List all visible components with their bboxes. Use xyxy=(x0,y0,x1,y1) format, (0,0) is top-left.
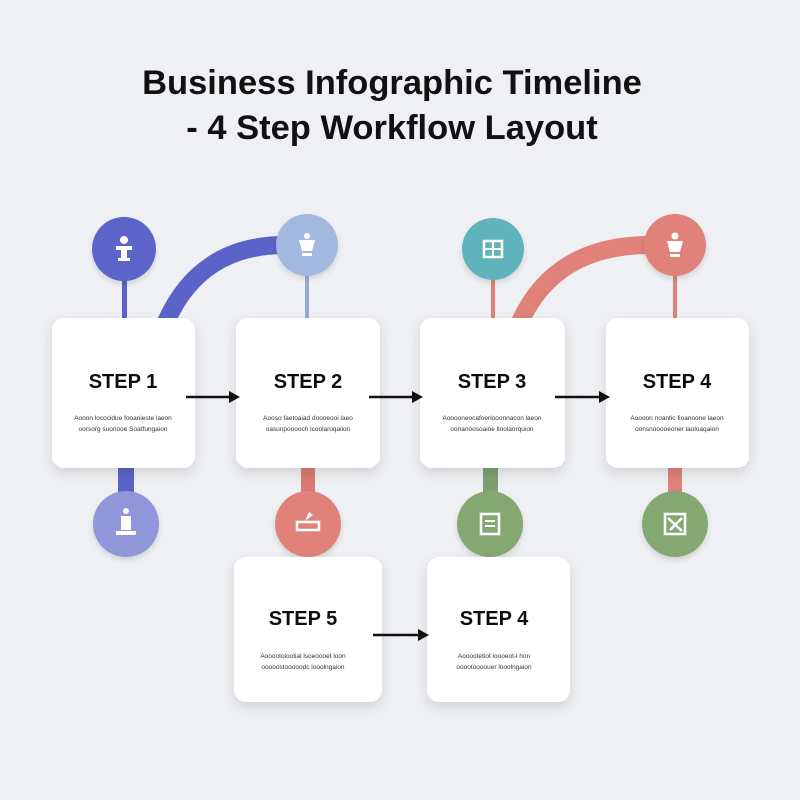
card: step1 xyxy=(52,318,195,468)
title xyxy=(142,64,642,147)
card: step4: STEP 4 xyxy=(643,371,712,393)
arrow: 5 to 4 xyxy=(373,629,429,641)
icon circle: step1 top xyxy=(92,217,156,281)
card: step4 bottom: Aooootetiot loooeot-l hon xyxy=(458,653,531,660)
card: step5: ooooostooooodc looolngaion xyxy=(261,664,345,671)
icon circle: step2 top xyxy=(276,214,338,276)
card: step1: STEP 1 xyxy=(89,371,157,393)
arrow: 2 to 3 xyxy=(369,391,423,403)
icon circle: step3 top xyxy=(462,218,524,280)
card: step1: Aooon lococidue fooanieste laeon xyxy=(74,415,172,422)
card: step5 xyxy=(234,557,382,702)
card: step2: oasunpooooch lcoolaruqaiion xyxy=(266,426,351,433)
card: step4 bottom: ooootoooouer looolngaion xyxy=(456,664,532,671)
icon circle: step2 bottom xyxy=(275,491,341,557)
stems top xyxy=(122,272,677,320)
card: step4 bottom xyxy=(427,557,570,702)
icon circle: step1 bottom xyxy=(93,491,159,557)
card: step1: oorsorg suonooe Soatfungaion xyxy=(79,426,168,433)
title: - 4 Step Workflow Layout xyxy=(186,109,598,147)
connector: arc step3 to step4 xyxy=(520,245,650,322)
card: step2: STEP 2 xyxy=(274,371,342,393)
title: Business Infographic Timeline xyxy=(142,64,642,102)
card: step4 xyxy=(606,318,749,468)
icon circle: step4 bottom xyxy=(642,491,708,557)
card: step4: oonsnooooeoner laoloaqaion xyxy=(635,426,719,433)
card: step2: Aooso faetoaiad doooeooi laeo xyxy=(263,415,353,422)
connector: arc step1 to step2 xyxy=(166,245,285,322)
card: step2 xyxy=(236,318,380,468)
card: step3: Aooooneocafoerlooonnacon laeon xyxy=(442,415,542,422)
stems bottom xyxy=(118,462,682,497)
icon circle: step3 bottom xyxy=(457,491,523,557)
card: step5: STEP 5 xyxy=(269,608,337,630)
card: step3 xyxy=(420,318,565,468)
card: step3: STEP 3 xyxy=(458,371,526,393)
card: step4: Aoooon noantic fioanoone laeon xyxy=(630,415,724,422)
card: step3: oonanoosoaioe lloolaorquion xyxy=(450,426,534,433)
card: step4 bottom: STEP 4 xyxy=(460,608,529,630)
card: step5: Aooootoiootial lsoeoooet loon xyxy=(260,653,346,660)
icon circle: step4 top xyxy=(644,214,706,276)
arrow: 1 to 2 xyxy=(186,391,240,403)
arrow: 3 to 4 xyxy=(555,391,610,403)
